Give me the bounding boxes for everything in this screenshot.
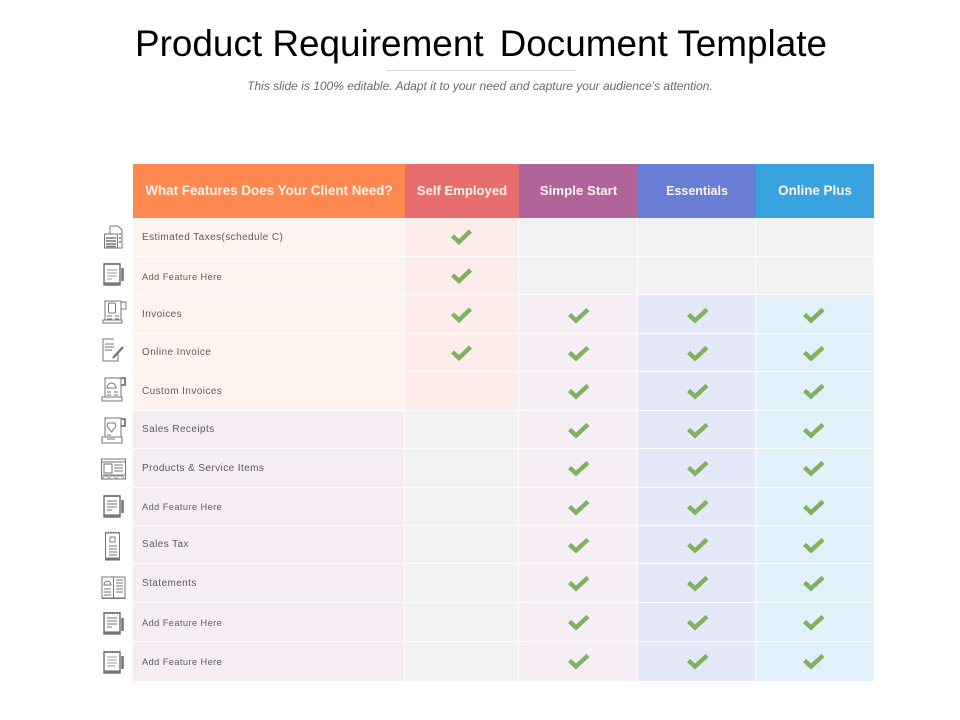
row label: Sales Tax xyxy=(142,539,189,550)
row label: Add Feature Here xyxy=(142,502,222,512)
header: essentials xyxy=(638,164,756,218)
row label: Estimated Taxes(schedule C) xyxy=(142,232,283,243)
header: simple start xyxy=(519,164,638,218)
icon: notepad xyxy=(104,496,122,517)
row label: Invoices xyxy=(142,309,182,320)
header: self employed: Self Employed xyxy=(417,183,507,198)
subtitle: This slide is 100% editable. Adapt it to your need and capture your audience’s attention. xyxy=(247,79,713,93)
header: online plus xyxy=(756,164,874,218)
icon: sales receipt xyxy=(102,418,125,443)
comparison table xyxy=(133,218,874,681)
icon: notepad xyxy=(104,652,122,673)
icon: invoice phone xyxy=(103,301,126,323)
header: essentials: Essentials xyxy=(666,184,728,198)
icon: notepad xyxy=(104,613,122,634)
row label: Add Feature Here xyxy=(142,272,222,282)
header: features xyxy=(133,164,405,218)
row label: Online Invoice xyxy=(142,347,211,358)
header: online plus: Online Plus xyxy=(778,183,852,198)
row label: Products & Service Items xyxy=(142,463,264,474)
row label: Add Feature Here xyxy=(142,618,222,628)
icon: custom invoice xyxy=(102,378,125,401)
icon: sales tax xyxy=(105,532,120,560)
header: simple start: Simple Start xyxy=(540,183,617,198)
icon: statements book xyxy=(102,577,126,598)
title: Product Requirement Document Template xyxy=(135,23,827,64)
row label: Statements xyxy=(142,578,197,589)
icon column xyxy=(101,226,126,674)
header: self employed xyxy=(405,164,519,218)
header: features: What Features Does Your Client Need? xyxy=(145,183,393,198)
icon: online invoice pen xyxy=(103,339,123,361)
row label: Sales Receipts xyxy=(142,424,215,435)
icon: products and services xyxy=(102,459,126,479)
icon: notepad xyxy=(104,264,122,285)
row label: Custom Invoices xyxy=(142,386,222,397)
icon: tax document xyxy=(104,226,122,248)
row label: Add Feature Here xyxy=(142,657,222,667)
